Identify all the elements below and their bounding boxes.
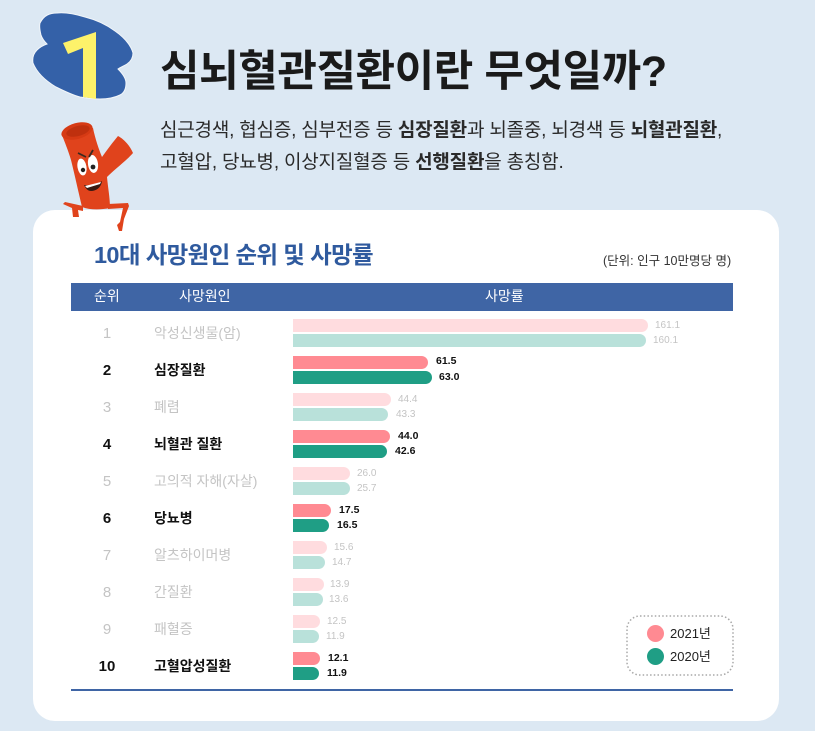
row 7: 15.6 [334,542,353,553]
row 3: 폐렴 [154,399,180,415]
row 5: 25.7 [357,483,376,494]
row 4: 4 [103,436,111,453]
row 9: 11.9 [326,631,345,642]
icon: blood vessel mascot [61,122,133,231]
description text: 고혈압, 당뇨병, 이상지질혈증 등 선행질환을 총칭함. [160,152,564,173]
row 10: 12.1 [328,652,348,664]
row 2: 61.5 [436,355,456,367]
row 5: 고의적 자해(자살) [154,473,257,489]
row 7: 7 [103,547,111,564]
row 9: 12.5 [327,616,346,627]
row 7: 알츠하이머병 [154,547,231,563]
row 10: 11.9 [327,667,347,679]
table header: 사망원인 [179,288,231,304]
description text [160,120,722,173]
row 3: 44.4 [398,394,417,405]
row 3: 43.3 [396,409,415,420]
row 4: 44.0 [398,430,418,442]
legend item: 2021 [647,625,711,642]
table header: 사망률 [485,288,524,304]
description text: 심근경색, 협심증, 심부전증 등 심장질환과 뇌졸중, 뇌경색 등 뇌혈관질환, [160,120,722,141]
legend: 2021년 [670,626,711,641]
title: 심뇌혈관질환이란 무엇일까? [160,48,667,96]
row 8: 간질환 [154,584,193,600]
row 6: 16.5 [337,519,357,531]
row 1: 악성신생물(암) [154,325,241,341]
row 4: 뇌혈관 질환 [154,436,222,452]
row 2: 2 [103,362,111,379]
row 8: 13.9 [330,579,349,590]
row 8: 13.6 [329,594,348,605]
icon: number 1 badge [32,12,134,100]
row 6: 6 [103,510,111,527]
row 2: 63.0 [439,371,459,383]
table header: 순위 [94,288,120,304]
legend: 2020년 [670,649,711,664]
row 1: 161.1 [655,320,680,331]
row 8: 8 [103,584,111,601]
row 6: 17.5 [339,504,359,516]
chart heading: 10대 사망원인 순위 및 사망률 [94,242,373,268]
legend [626,615,734,676]
unit note: (단위: 인구 10만명당 명) [603,254,731,268]
row 10: 10 [99,658,115,675]
row 3: 3 [103,399,111,416]
table header [71,283,733,311]
row 9: 패혈증 [154,621,193,637]
legend item: 2020 [647,648,711,665]
panel: chart card [33,210,779,721]
row 5: 26.0 [357,468,376,479]
row 5: 5 [103,473,111,490]
row 9: 9 [103,621,111,638]
row 1: 160.1 [653,335,678,346]
row 2: 심장질환 [154,362,206,378]
row 4: 42.6 [395,445,415,457]
row 1: 1 [103,325,111,342]
row 7: 14.7 [332,557,351,568]
row 10: 고혈압성질환 [154,658,231,674]
row 6: 당뇨병 [154,510,193,526]
